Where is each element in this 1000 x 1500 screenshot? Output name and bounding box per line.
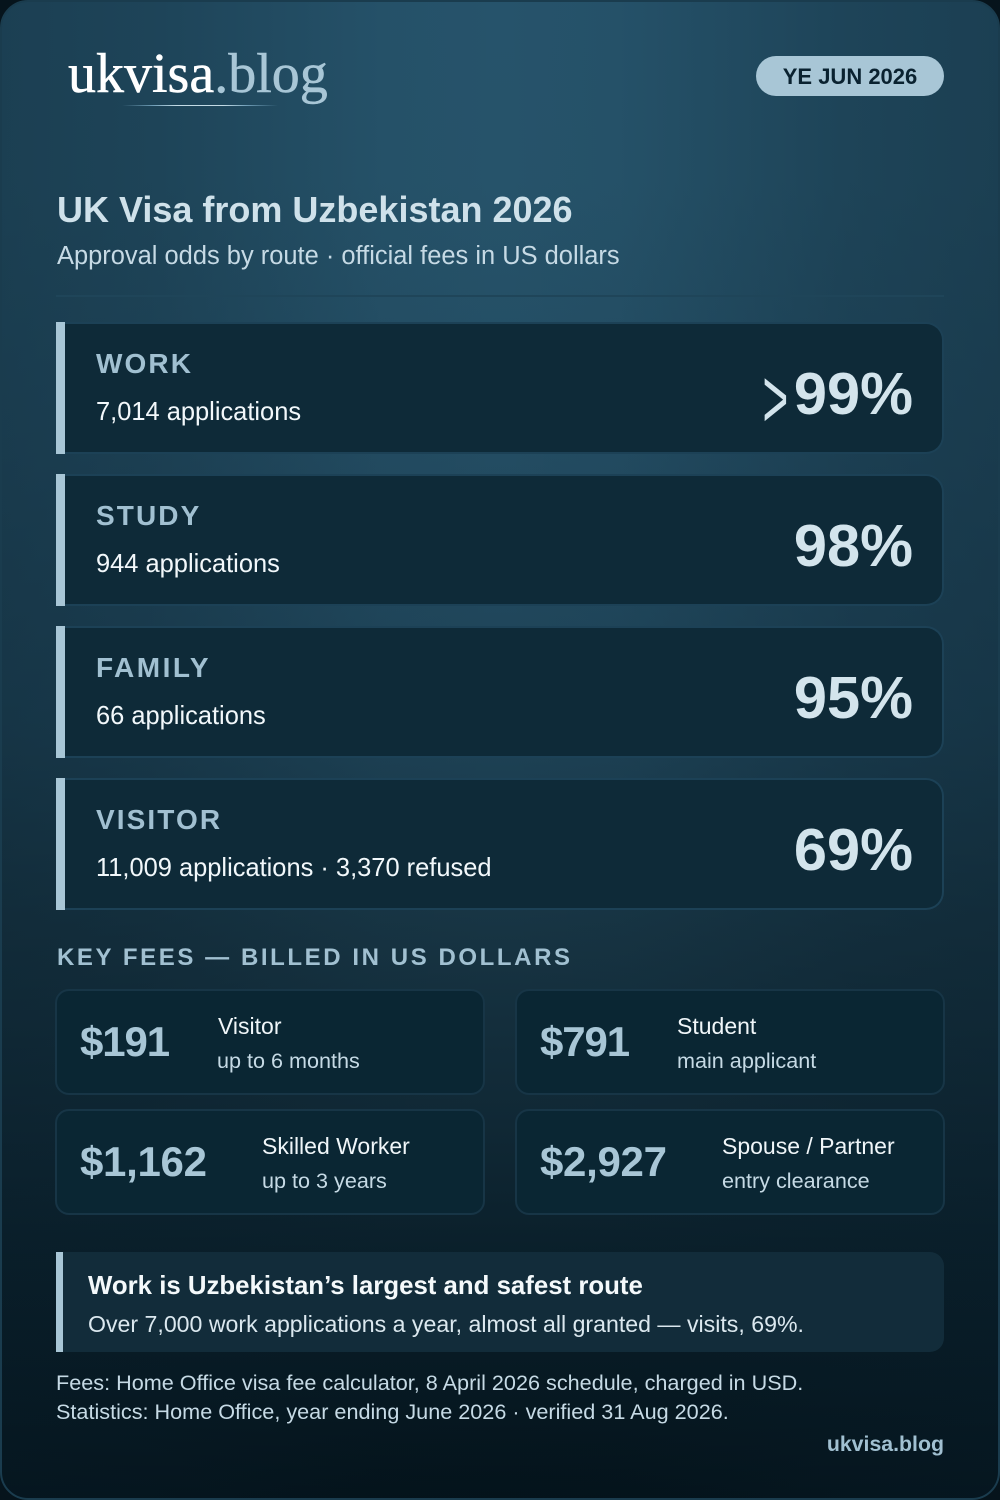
fee: student	[515, 989, 945, 1095]
fee name: skilled worker: Skilled Worker	[262, 1133, 410, 1159]
card: visitor	[56, 778, 944, 910]
label: work: WORK	[96, 348, 193, 379]
source: statistics: Statistics: Home Office, year ending June 2026 · verified 31 Aug 2026.	[56, 1399, 729, 1424]
fee name: visitor: Visitor	[218, 1013, 282, 1039]
fee detail: visitor: up to 6 months	[217, 1048, 360, 1073]
approval rate: family: 95%	[794, 664, 913, 731]
fee: spouse	[515, 1109, 945, 1215]
card: work	[56, 322, 942, 454]
callout	[56, 1252, 944, 1352]
amount: visitor: $191	[80, 1018, 169, 1065]
callout heading: Work is Uzbekistan’s largest and safest route	[88, 1272, 643, 1300]
fee name: student: Student	[677, 1013, 756, 1039]
fee: visitor	[55, 989, 485, 1095]
applications: family: 66 applications	[96, 702, 266, 730]
label: family: FAMILY	[96, 652, 211, 683]
card: family	[56, 626, 944, 758]
sources	[56, 1370, 803, 1424]
label: study: STUDY	[96, 500, 201, 531]
subtitle: Approval odds by route · official fees in US dollars	[57, 242, 620, 270]
approval rate: visitor: 69%	[794, 816, 913, 883]
card: work: >	[762, 351, 788, 446]
fee detail: student: main applicant	[677, 1048, 816, 1073]
approval rate: study: 98%	[794, 512, 913, 579]
fee detail: spouse: entry clearance	[722, 1168, 870, 1193]
logo underline	[122, 105, 278, 106]
amount: spouse: $2,927	[540, 1138, 667, 1185]
logo wordmark: ukvisa.blog	[68, 43, 328, 105]
date badge: YE JUN 2026	[783, 64, 917, 89]
approval rate: work	[762, 351, 913, 446]
source: fees: Fees: Home Office visa fee calculator, 8 April 2026 schedule, charged in USD.	[56, 1370, 803, 1395]
applications: study: 944 applications	[96, 550, 280, 578]
callout accent bar	[56, 1252, 63, 1352]
title: UK Visa from Uzbekistan 2026	[57, 189, 573, 230]
fee detail: skilled worker: up to 3 years	[262, 1168, 387, 1193]
fee name: spouse: Spouse / Partner	[722, 1133, 895, 1159]
amount: student: $791	[540, 1018, 629, 1065]
label: visitor: VISITOR	[96, 804, 222, 835]
fee: skilled worker	[55, 1109, 485, 1215]
applications: visitor: 11,009 applications · 3,370 refused	[96, 854, 492, 882]
approval rate: work: 99%	[794, 360, 913, 427]
fees heading: KEY FEES — BILLED IN US DOLLARS	[57, 944, 573, 971]
footer brand: ukvisa.blog	[827, 1432, 944, 1456]
applications: work: 7,014 applications	[96, 398, 301, 426]
card: study	[56, 474, 944, 606]
date badge	[756, 56, 944, 96]
callout text: Over 7,000 work applications a year, almost all granted — visits, 69%.	[88, 1311, 804, 1337]
amount: skilled worker: $1,162	[80, 1138, 207, 1185]
